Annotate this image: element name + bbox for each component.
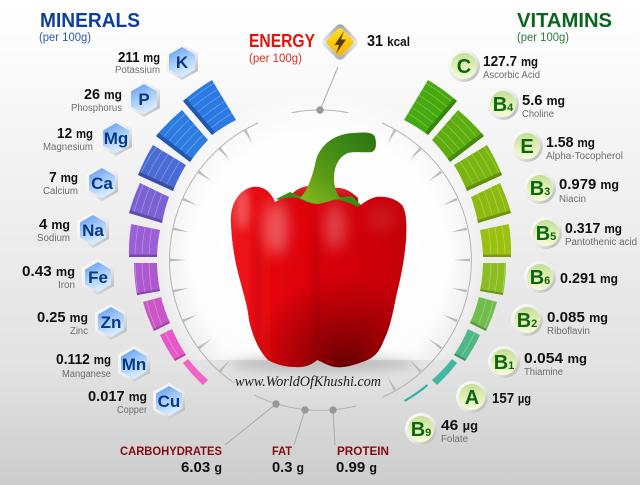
- vitamin: B6: 0.291 mg: [560, 270, 618, 287]
- vitamin: C: [448, 50, 540, 82]
- pepper stem: [300, 132, 376, 204]
- energy block: [249, 22, 410, 114]
- mineral: magnesium: Magnesium: [43, 142, 93, 153]
- mineral: phosphorus: P: [138, 90, 150, 109]
- mineral: iron: Iron: [58, 280, 75, 291]
- macro: fat: FAT: [272, 444, 293, 458]
- vitamin: B1: 0.054 mg: [524, 350, 587, 367]
- mineral: calcium: [43, 165, 118, 201]
- vitamin: B9: Folate: [441, 434, 468, 445]
- bar: vitamin B6: [480, 263, 506, 295]
- white backdrop glow: [140, 80, 500, 360]
- minerals list: [22, 44, 198, 419]
- mineral: phosphorus: Phosphorus: [71, 103, 122, 114]
- mineral: copper: [88, 383, 185, 419]
- mineral: magnesium: [43, 120, 132, 156]
- mineral: potassium: Potassium: [115, 65, 160, 76]
- mineral: iron: [22, 259, 114, 295]
- vitamin: B4: 5.6 mg: [522, 92, 565, 109]
- vitamin: B3: Niacin: [559, 194, 586, 205]
- bar: vitamin A: [432, 359, 457, 385]
- energy subheading: (per 100g): [249, 53, 302, 65]
- mineral: calcium: Ca: [91, 174, 113, 193]
- vitamin: B3: B3: [530, 178, 550, 200]
- energy value: 31 kcal: [367, 33, 410, 50]
- vitamin: B4: [487, 88, 565, 120]
- watermark: www.WorldOfKhushi.com: [235, 374, 381, 390]
- heading: minerals: [39, 10, 140, 44]
- bar: iron: [134, 263, 160, 295]
- mineral: zinc: Zn: [101, 313, 121, 332]
- heading: vitamins: VITAMINS: [517, 10, 612, 32]
- central gauge ring with ticks: [170, 110, 471, 410]
- vitamin: E: [511, 130, 623, 162]
- bar chart: vitamins: [404, 80, 512, 402]
- mineral: sodium: Na: [82, 221, 104, 240]
- vitamin: B4: Choline: [522, 109, 554, 120]
- bar: calcium: [129, 183, 169, 223]
- vitamin: B9: 46 µg: [441, 417, 478, 434]
- bar: vitamin B9: [404, 384, 428, 402]
- bar: manganese: [160, 329, 186, 361]
- vitamins list: [405, 50, 637, 445]
- vitamin: E: Alpha-Tocopherol: [546, 151, 623, 162]
- macro: carbohydrates: CARBOHYDRATES: [120, 444, 222, 458]
- mineral: phosphorus: 26 mg: [84, 86, 122, 103]
- icon: energy bolt: [320, 22, 360, 62]
- bar: vitamin B3: [471, 183, 511, 223]
- energy heading: ENERGY: [249, 31, 315, 51]
- mineral: zinc: 0.25 mg: [37, 309, 88, 326]
- bar: vitamin B1: [454, 329, 480, 361]
- macro: fat: [272, 444, 304, 476]
- pepper body: [228, 184, 410, 370]
- mineral: copper: 0.017 mg: [88, 388, 147, 405]
- bar: vitamin E: [454, 145, 502, 191]
- mineral: sodium: Sodium: [37, 233, 70, 244]
- bar: copper: [183, 359, 208, 385]
- mineral: potassium: 211 mg: [118, 49, 160, 66]
- mineral: potassium: [115, 44, 198, 80]
- pepper calyx: [276, 192, 362, 211]
- vitamin: B6: B6: [530, 267, 550, 289]
- vitamin: C: Ascorbic Acid: [483, 70, 540, 81]
- vitamin: B4: B4: [493, 94, 514, 116]
- mineral: manganese: [56, 346, 150, 382]
- mineral: sodium: 4 mg: [39, 216, 70, 233]
- vitamin: B6: [524, 261, 618, 293]
- bar: phosphorus: [156, 110, 208, 162]
- mineral: zinc: Zinc: [70, 326, 88, 337]
- bar: vitamin C: [404, 80, 457, 135]
- vitamin: B2: [511, 304, 608, 337]
- mineral: copper: Copper: [117, 405, 148, 416]
- vitamin: B2: B2: [517, 310, 537, 332]
- macro: protein: [336, 444, 389, 476]
- macro: carbohydrates: 6.03 g: [181, 459, 222, 476]
- bar: vitamin B2: [470, 297, 497, 331]
- mineral: manganese: Mn: [122, 355, 146, 374]
- illustration: red bell pepper: [228, 132, 410, 370]
- bar: zinc: [143, 297, 170, 331]
- vitamin: B9: B9: [411, 419, 431, 441]
- bar: vitamin B5: [480, 224, 511, 257]
- mineral: iron: 0.43 mg: [22, 263, 75, 280]
- mineral: iron: Fe: [88, 268, 108, 287]
- vitamin: B1: Thiamine: [524, 367, 563, 378]
- vitamin: B3: [524, 172, 619, 205]
- heading: vitamins: (per 100g): [517, 32, 569, 44]
- macro: protein: 0.99 g: [336, 459, 377, 476]
- mineral: calcium: 7 mg: [49, 169, 78, 186]
- vitamin: B5: 0.317 mg: [565, 220, 622, 237]
- bar: magnesium: [138, 145, 186, 191]
- heading: vitamins: [517, 10, 612, 44]
- mineral: sodium: [37, 212, 109, 248]
- pepper back lobe: [288, 186, 358, 215]
- macro: protein: PROTEIN: [337, 444, 389, 458]
- vitamin: C: 127.7 mg: [483, 53, 538, 70]
- vitamin: B5: [530, 217, 637, 249]
- vitamin: B9: [405, 413, 478, 445]
- energy pointer: [316, 67, 338, 114]
- vitamin: B5: Pantothenic acid: [565, 237, 637, 248]
- vitamin: B2: Riboflavin: [547, 326, 590, 337]
- macronutrient pointers: [225, 400, 337, 445]
- bar chart: minerals: [128, 80, 236, 385]
- mineral: calcium: Calcium: [43, 186, 78, 197]
- mineral: manganese: Manganese: [62, 369, 111, 380]
- mineral: magnesium: Mg: [104, 129, 128, 148]
- vitamin: A: A: [465, 387, 479, 409]
- mineral: magnesium: 12 mg: [57, 125, 93, 142]
- vitamin: C: C: [457, 56, 471, 78]
- vitamin: E: 1.58 mg: [546, 134, 595, 151]
- vitamin: B1: [488, 346, 587, 378]
- mineral: zinc: [37, 304, 127, 340]
- heading: minerals: (per 100g): [39, 32, 91, 44]
- vitamin: B5: B5: [536, 223, 556, 245]
- mineral: phosphorus: [71, 81, 160, 117]
- vitamin: B1: B1: [494, 352, 514, 374]
- heading: minerals: MINERALS: [40, 10, 140, 32]
- vitamin: A: [456, 381, 531, 413]
- vitamin: E: E: [520, 136, 534, 158]
- bar: sodium: [129, 224, 160, 257]
- bar: vitamin B4: [432, 110, 484, 162]
- bar: potassium: [183, 80, 236, 135]
- macro: fat: 0.3 g: [272, 459, 304, 476]
- vitamin: B3: 0.979 mg: [559, 176, 619, 193]
- mineral: copper: Cu: [158, 392, 180, 411]
- mineral: potassium: K: [176, 53, 189, 72]
- macro: carbohydrates: [120, 444, 222, 476]
- mineral: manganese: 0.112 mg: [56, 351, 111, 368]
- pepper shadow: [230, 356, 414, 372]
- vitamin: B2: 0.085 mg: [547, 309, 608, 326]
- vitamin: A: 157 µg: [492, 390, 531, 407]
